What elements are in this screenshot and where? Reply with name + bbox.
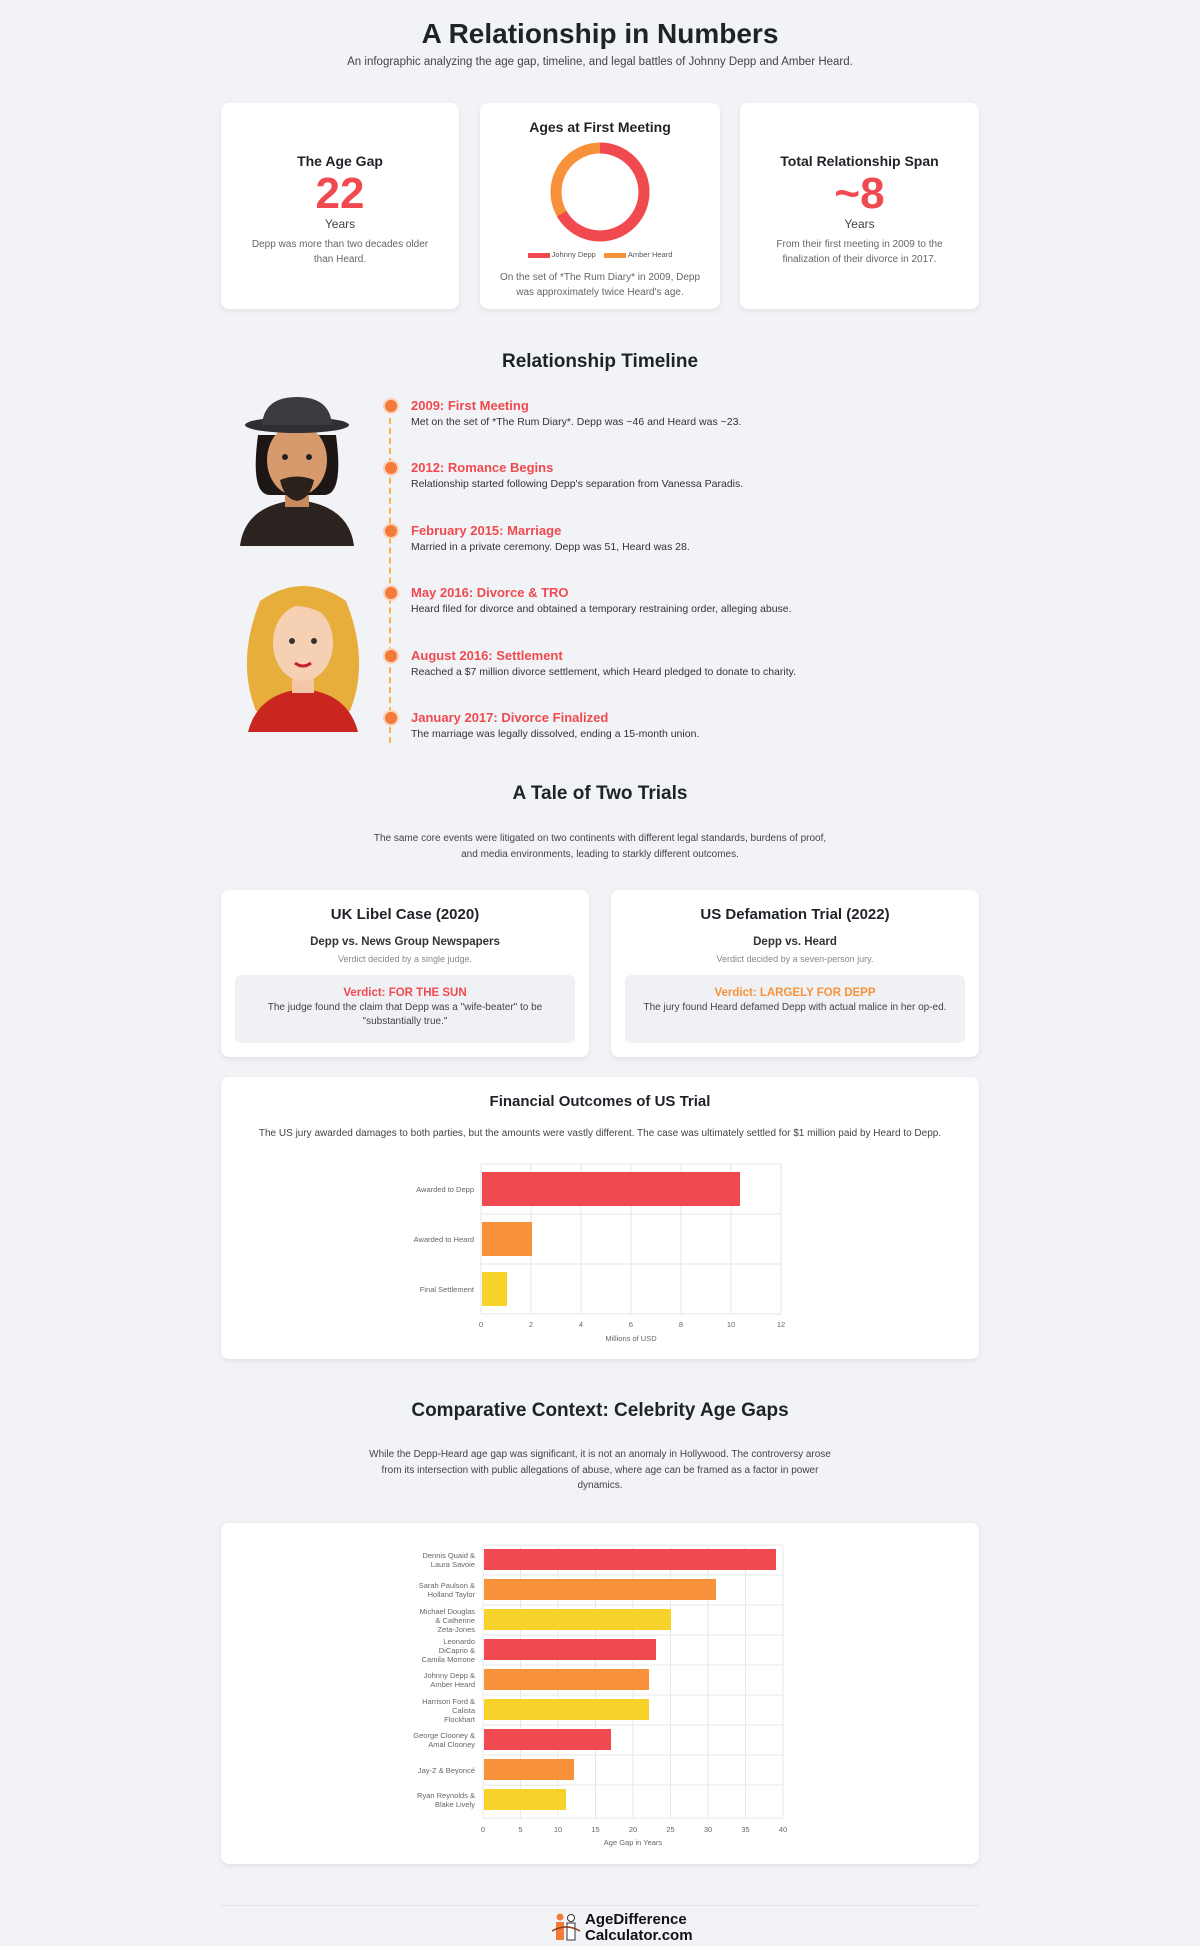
panel: US case: Depp vs. Heard <box>753 936 837 948</box>
item Aug 2016: August 2016: Settlement <box>411 648 563 663</box>
bar chart: age gaps: Johnny Depp & <box>424 1671 475 1680</box>
bar chart: financial: 0 <box>479 1320 483 1329</box>
item 2009: 2009: First Meeting <box>411 398 529 413</box>
panel: US case <box>611 890 979 1057</box>
item 2017: January 2017: Divorce Finalized <box>411 710 608 725</box>
bar chart: age gaps: Sarah Paulson & <box>419 1581 475 1590</box>
icon: Heard avatar <box>246 586 360 732</box>
item 2012: 2012: Romance Begins <box>411 460 553 475</box>
bar chart: age gaps: Ryan Reynolds & <box>417 1791 475 1800</box>
item 2017: The marriage was legally dissolved, ending a 15-month union. <box>411 728 699 740</box>
card: relationship span <box>740 103 979 309</box>
panel: UK case: Depp vs. News Group Newspapers <box>310 936 500 948</box>
bar chart: age gaps: 10 <box>554 1825 562 1834</box>
panel: UK case <box>221 890 589 1057</box>
verdict box <box>235 975 575 1043</box>
card: age gap <box>221 103 459 309</box>
panel: US case: Verdict decided by a seven-person jury. <box>717 954 873 964</box>
bar chart: age gaps: Camila Morrone <box>422 1655 475 1664</box>
bar chart: financial: 6 <box>629 1320 633 1329</box>
bar chart: financial: 2 <box>529 1320 533 1329</box>
context paragraph: While the Depp-Heard age gap was significant, it is not an anomaly in Hollywood. The controversy arose from its intersection with public allegations of abuse, where age can be framed as a factor in power dynamics. <box>369 1449 831 1491</box>
bar chart: age gaps: Calista <box>452 1706 476 1715</box>
bar chart: age gaps: 20 <box>629 1825 637 1834</box>
bar chart: age gaps: Amber Heard <box>430 1680 475 1689</box>
footer logo: Calculator.com <box>585 1927 693 1944</box>
bar chart: financial: 10 <box>727 1320 735 1329</box>
footer logo <box>552 1911 693 1944</box>
card: ages donut <box>480 103 720 309</box>
bar chart: financial: Awarded to Heard <box>414 1235 474 1244</box>
bar chart: age gaps: Holland Taylor <box>428 1590 475 1599</box>
item Aug 2016: Reached a $7 million divorce settlement, which Heard pledged to donate to charity. <box>411 666 796 678</box>
bar chart: age gaps: 25 <box>666 1825 675 1834</box>
card: relationship span: Years <box>844 217 875 231</box>
bar chart: age gaps: 0 <box>481 1825 485 1834</box>
legend: Johnny Depp Amber Heard <box>552 250 672 259</box>
card: age gap: 22 <box>316 169 364 218</box>
card: age gap: The Age Gap <box>297 153 383 169</box>
verdict box: Verdict: FOR THE SUN <box>343 987 467 999</box>
bar chart: financial: Millions of USD <box>605 1334 657 1343</box>
bar chart: financial: Final Settlement <box>420 1285 475 1294</box>
heading: comparative context: Comparative Context: Celebrity Age Gaps <box>411 1400 789 1421</box>
bar chart: financial: 8 <box>679 1320 683 1329</box>
verdict box: Verdict: LARGELY FOR DEPP <box>714 987 876 999</box>
item May 2016: Heard filed for divorce and obtained a temporary restraining order, alleging abuse. <box>411 603 792 615</box>
bar chart: age gaps: Zeta-Jones <box>437 1625 475 1634</box>
panel: UK case: Verdict decided by a single judge. <box>338 954 472 964</box>
item 2017 <box>383 710 699 740</box>
item 2012 <box>383 460 743 490</box>
item 2015: Married in a private ceremony. Depp was 51, Heard was 28. <box>411 541 690 553</box>
bar chart: age gaps: Michael Douglas <box>420 1607 475 1616</box>
icon: logo figures <box>552 1914 580 1940</box>
panel: celebrity chart <box>221 1523 979 1864</box>
card: age gap: Years <box>325 217 355 231</box>
icon: Depp avatar <box>240 397 354 546</box>
subtitle: An infographic analyzing the age gap, timeline, and legal battles of Johnny Depp and Amber Heard. <box>347 56 853 68</box>
item 2015 <box>383 523 690 553</box>
bar chart: age gaps: Leonardo <box>443 1637 475 1646</box>
heading: timeline: Relationship Timeline <box>502 351 698 372</box>
bar chart: age gaps: Dennis Quaid & <box>422 1551 475 1560</box>
panel: financial outcomes: The US jury awarded damages to both parties, but the amounts were vastly different. The case was ultimately settled for $1 million paid by Heard to Depp. <box>259 1128 941 1139</box>
card: relationship span: Total Relationship Span <box>780 153 939 169</box>
bar chart: financial: Awarded to Depp <box>416 1185 474 1194</box>
item 2009: Met on the set of *The Rum Diary*. Depp was ~46 and Heard was ~23. <box>411 416 741 428</box>
verdict box <box>625 975 965 1043</box>
bar chart: age gaps: Laura Savoie <box>431 1560 475 1569</box>
item Aug 2016 <box>383 648 796 678</box>
bar chart: age gaps: George Clooney & <box>413 1731 475 1740</box>
card: ages donut: On the set of *The Rum Diary* in 2009, Depp was approximately twice Heard's age. <box>500 272 700 298</box>
item May 2016: May 2016: Divorce & TRO <box>411 585 569 600</box>
item 2009 <box>383 398 741 428</box>
card: relationship span: ~8 <box>834 169 885 218</box>
bar chart: age gaps: Flockhart <box>444 1715 476 1724</box>
heading: two trials: A Tale of Two Trials <box>513 783 687 804</box>
panel: financial outcomes: Financial Outcomes of US Trial <box>490 1093 710 1110</box>
panel: financial outcomes <box>221 1077 979 1359</box>
bar chart: age gaps: Jay-Z & Beyoncé <box>418 1766 475 1775</box>
title: A Relationship in Numbers <box>422 18 778 49</box>
bar chart: age gaps: DiCaprio & <box>439 1646 475 1655</box>
bar chart: financial: 12 <box>777 1320 785 1329</box>
bar chart: age gaps: 5 <box>518 1825 523 1834</box>
timeline line <box>389 398 391 743</box>
bar chart: age gaps: 40 <box>779 1825 787 1834</box>
panel: UK case: UK Libel Case (2020) <box>331 906 479 923</box>
bar chart: financial: 4 <box>579 1320 583 1329</box>
donut chart <box>550 142 650 242</box>
bar chart: age gaps: 15 <box>591 1825 600 1834</box>
verdict box: The judge found the claim that Depp was a "wife-beater" to be "substantially true." <box>268 1002 542 1027</box>
timeline items <box>383 398 796 740</box>
item May 2016 <box>383 585 792 615</box>
bar chart: age gaps: Amal Clooney <box>428 1740 475 1749</box>
card: ages donut: Ages at First Meeting <box>529 119 671 135</box>
footer logo: AgeDifference <box>585 1911 687 1928</box>
bar chart: age gaps: Blake Lively <box>435 1800 475 1809</box>
bar chart: age gaps: Harrison Ford & <box>422 1697 475 1706</box>
verdict box: The jury found Heard defamed Depp with actual malice in her op-ed. <box>644 1002 946 1013</box>
bar chart: age gaps: 35 <box>741 1825 750 1834</box>
item 2015: February 2015: Marriage <box>411 523 561 538</box>
bar chart: age gaps: Age Gap in Years <box>604 1838 662 1847</box>
card: age gap: Depp was more than two decades older than Heard. <box>252 239 428 265</box>
item 2012: Relationship started following Depp's separation from Vanessa Paradis. <box>411 478 743 490</box>
card: relationship span: From their first meeting in 2009 to the finalization of their divorce in 2017. <box>776 239 943 265</box>
panel: US case: US Defamation Trial (2022) <box>700 906 890 923</box>
bar chart: age gaps: 30 <box>704 1825 712 1834</box>
bar chart: financial <box>414 1164 785 1343</box>
trials intro: The same core events were litigated on two continents with different legal standards, burdens of proof, and media environments, leading to starkly different outcomes. <box>374 833 826 860</box>
bar chart: age gaps: & Catherine <box>435 1616 475 1625</box>
bar chart: age gaps <box>413 1544 787 1847</box>
